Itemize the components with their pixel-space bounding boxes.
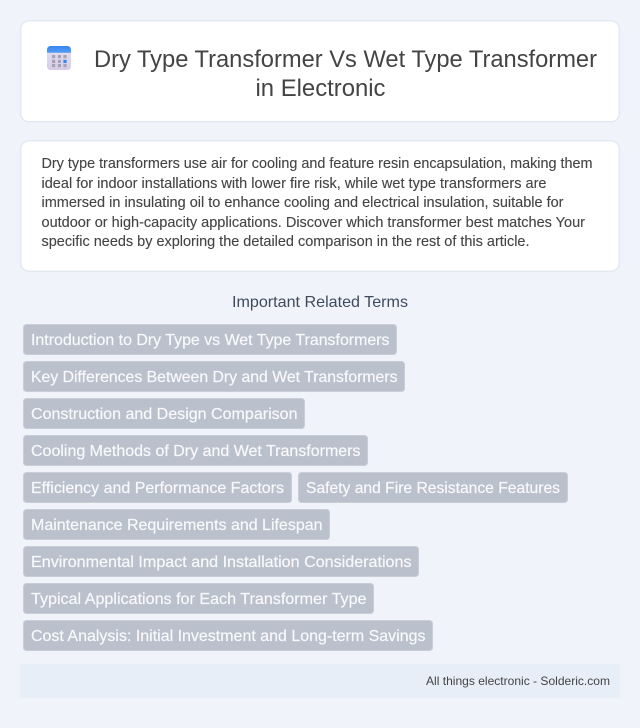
panel: title card (21, 21, 619, 122)
tag: safety (298, 472, 568, 502)
tag: environmental (24, 546, 418, 576)
tag: cost analysis (24, 620, 432, 650)
tag: efficiency: Efficiency and Performance Factors (31, 480, 284, 497)
tag: key differences (24, 362, 404, 392)
tag: key differences: Key Differences Between Dry and Wet Transformers (31, 369, 398, 386)
tag: cost analysis: Cost Analysis: Initial Investment and Long-term Savings (31, 628, 426, 645)
tag: typical applications: Typical Applications for Each Transformer Type (31, 591, 367, 608)
description text: immersed in insulating oil to enhance cooling and electrical insulation, suitable for (42, 195, 564, 211)
description text: Dry type transformers use air for cooling and feature resin encapsulation, making them (42, 156, 592, 172)
tag: construction (24, 398, 304, 428)
tag: cooling (24, 436, 368, 466)
heading: important related terms: Important Related Terms (232, 294, 408, 311)
title: in Electronic (256, 75, 386, 102)
tag: introduction: Introduction to Dry Type vs Wet Type Transformers (31, 332, 390, 349)
panel: description card (21, 141, 619, 271)
tag: safety: Safety and Fire Resistance Features (306, 480, 560, 497)
icon: calendar grid (47, 46, 71, 70)
tag: typical applications (24, 584, 374, 614)
title (94, 46, 597, 102)
description text (42, 156, 592, 250)
footer (20, 664, 620, 698)
tag: introduction (24, 324, 396, 354)
description text: ideal for indoor installations with lower fire risk, while wet type transformers are (42, 176, 546, 192)
tag: maintenance (24, 510, 330, 540)
tag: construction: Construction and Design Comparison (31, 406, 298, 423)
tag: environmental: Environmental Impact and Installation Considerations (31, 554, 412, 571)
tag: cooling: Cooling Methods of Dry and Wet Transformers (31, 443, 360, 460)
footer: All things electronic - Solderic.com (426, 674, 610, 688)
tag: efficiency (24, 472, 292, 502)
description text: outdoor or high-capacity applications. Discover which transformer best matches Your (42, 215, 585, 231)
description text: specific needs by exploring the detailed comparison in the rest of this article. (42, 234, 530, 250)
title: Dry Type Transformer Vs Wet Type Transformer (94, 46, 597, 73)
tag: maintenance: Maintenance Requirements and Lifespan (31, 517, 322, 534)
